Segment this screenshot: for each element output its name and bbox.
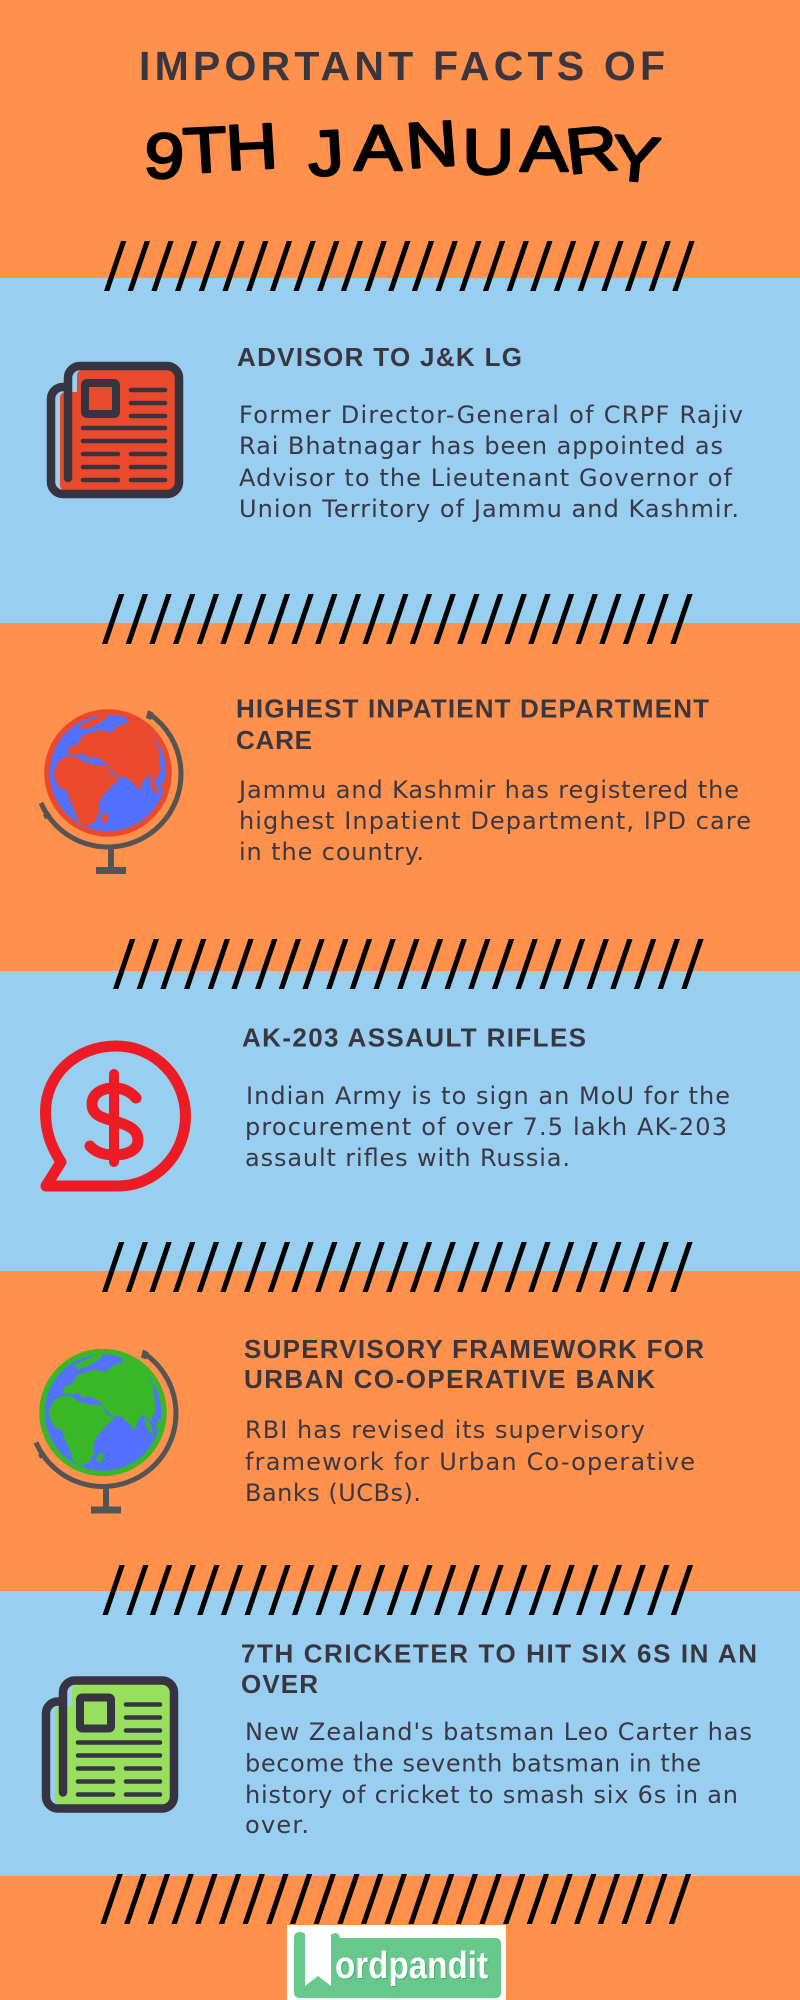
stripe divider 6 [100, 1874, 691, 1924]
heading: inpatient care: HIGHEST INPATIENT DEPARTMENT [236, 694, 709, 724]
panel background: rifles [0, 971, 800, 1271]
footer band [0, 1876, 800, 2000]
body: rifles [245, 1082, 730, 1172]
body: advisor: Former Director-General of CRPF Rajiv [239, 401, 743, 429]
body: supervisory framework: RBI has revised its supervisory [245, 1416, 645, 1444]
body: rifles: assault rifles with Russia. [245, 1144, 570, 1172]
heading: supervisory framework: URBAN CO-OPERATIVE BANK [244, 1364, 655, 1394]
heading: supervisory framework [244, 1334, 704, 1394]
body: advisor: Union Territory of Jammu and Kashmir. [239, 495, 739, 523]
body: rifles: procurement of over 7.5 lakh AK-203 [245, 1113, 727, 1141]
body: cricketer: New Zealand's batsman Leo Carter has [245, 1718, 752, 1746]
heading: supervisory framework: SUPERVISORY FRAMEWORK FOR [244, 1334, 704, 1364]
heading: cricketer: 7TH CRICKETER TO HIT SIX 6S IN AN [241, 1638, 757, 1668]
stripe divider 4 [102, 1242, 693, 1292]
heading: cricketer [241, 1638, 757, 1699]
icon: green globe [36, 1350, 176, 1514]
body: advisor: Rai Bhatnagar has been appointed as [239, 432, 723, 460]
logo: wordpandit: ordpandit [335, 1945, 488, 1987]
body: supervisory framework: Banks (UCBs). [245, 1479, 421, 1507]
panel background: advisor [0, 278, 800, 623]
logo: wordpandit: ordpandit [336, 1946, 489, 1988]
heading: advisor: ADVISOR TO J&K LG [237, 342, 522, 372]
stripe divider 1 [104, 241, 695, 291]
heading: inpatient care: CARE [236, 725, 312, 755]
icon: red newspaper [51, 366, 179, 494]
body: cricketer: over. [245, 1811, 309, 1839]
heading: inpatient care [236, 694, 709, 755]
icon: dollar speech bubble [46, 1046, 186, 1186]
stripe divider 2 [102, 594, 693, 644]
body: cricketer [245, 1718, 752, 1839]
title: important facts of: IMPORTANT FACTS OF [139, 43, 665, 89]
heading: cricketer: OVER [241, 1669, 318, 1699]
panel background: supervisory framework [0, 1271, 800, 1591]
title: 9th january: 9TH JANUARY [142, 107, 663, 197]
panel background: inpatient care [0, 623, 800, 971]
body: inpatient care [237, 776, 751, 866]
icon: green newspaper [46, 1680, 174, 1808]
logo: wordpandit [287, 1925, 506, 2000]
body: advisor [239, 401, 743, 523]
body: inpatient care: highest Inpatient Department, IPD care [239, 807, 751, 835]
icon: red globe [41, 710, 181, 874]
header band [0, 0, 800, 278]
body: rifles: Indian Army is to sign an MoU for the [246, 1082, 730, 1110]
stripe divider 5 [102, 1565, 693, 1615]
panel background: cricketer [0, 1591, 800, 1876]
body: cricketer: history of cricket to smash six 6s in an [245, 1781, 738, 1809]
heading: rifles: AK-203 ASSAULT RIFLES [242, 1022, 586, 1052]
stripe divider 3 [113, 939, 704, 989]
body: supervisory framework [245, 1416, 695, 1507]
body: inpatient care: Jammu and Kashmir has registered the [237, 776, 739, 804]
body: cricketer: become the seventh batsman in the [245, 1750, 701, 1778]
body: inpatient care: in the country. [239, 838, 424, 866]
body: supervisory framework: framework for Urban Co-operative [245, 1448, 695, 1476]
body: advisor: Advisor to the Lieutenant Governor of [239, 464, 733, 492]
